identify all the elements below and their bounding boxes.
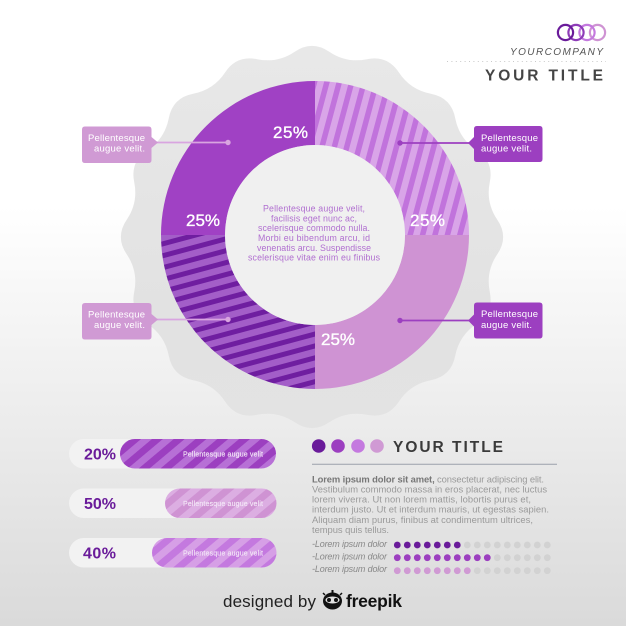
centre text: facilisis eget nunc ac, xyxy=(271,213,357,223)
logo and company heading xyxy=(447,25,606,84)
progress bar: 20%: 20% xyxy=(84,446,116,464)
centre text xyxy=(248,204,381,263)
colour dots xyxy=(312,439,384,453)
callout: bottom left: augue velit. xyxy=(94,320,145,331)
section heading: YOUR TITLE xyxy=(393,439,503,456)
callout: top left: Pellentesque xyxy=(88,133,145,144)
donut chart xyxy=(161,81,469,389)
percentage labels xyxy=(186,123,445,349)
callout: bottom right: augue velit. xyxy=(481,320,532,331)
percentage labels: 25% xyxy=(321,330,355,349)
paragraph: lorem viverra. Ut non lorem mattis, lobortis purus et, xyxy=(312,494,531,504)
icon: freepik mascot xyxy=(323,590,342,610)
progress bar: 50%: 50% xyxy=(84,496,116,513)
segment: top right striped xyxy=(315,81,469,235)
footer credit: designed by xyxy=(223,592,316,611)
centre text: venenatis arcu. Suspendisse xyxy=(257,243,371,253)
callout: top right: Pellentesque xyxy=(481,133,538,144)
paragraph: tempus quis tellus. xyxy=(312,524,389,535)
top title: YOUR TITLE xyxy=(485,68,603,84)
company name: YOURCOMPANY xyxy=(510,47,604,58)
callout: top right: augue velit. xyxy=(481,144,532,154)
callout: bottom right xyxy=(397,302,542,338)
percentage labels: 25% xyxy=(410,211,445,230)
panel: lower right text block xyxy=(312,439,557,574)
callout: bottom left: Pellentesque xyxy=(88,310,145,320)
paragraph: interdum justo. Ut et interdum mauris, ut egestas sapien. xyxy=(312,504,549,515)
progress bar: 40% xyxy=(69,538,276,568)
percentage labels: 25% xyxy=(273,123,308,142)
paragraph: Vestibulum commodo massa in eros placerat, nec luctus xyxy=(312,483,547,494)
scalloped badge backdrop xyxy=(121,46,503,428)
percentage labels: 25% xyxy=(186,211,220,230)
callout: top left xyxy=(82,126,231,163)
segment: bottom left striped xyxy=(161,235,315,389)
progress bar: 50% xyxy=(69,488,276,518)
dot rating list: -Lorem ipsum dolor xyxy=(312,539,388,549)
centre disc xyxy=(225,145,405,325)
centre text: scelerisque commodo nulla. xyxy=(258,223,370,233)
icon: four linked rings xyxy=(558,25,605,40)
centre text: scelerisque vitae enim eu finibus xyxy=(248,253,381,263)
dot rating list: -Lorem ipsum dolor xyxy=(312,552,388,562)
segment: top left solid xyxy=(161,81,315,235)
progress bar: 40%: 40% xyxy=(83,546,116,562)
progress bar: 20%: Pellentesque augue velit xyxy=(183,452,263,458)
dot rating list xyxy=(312,539,551,574)
callout: bottom right: Pellentesque xyxy=(481,309,538,320)
footer credit xyxy=(223,590,402,611)
paragraph xyxy=(312,473,549,535)
centre text: Pellentesque augue velit, xyxy=(263,204,365,214)
segment: bottom right solid xyxy=(315,235,469,389)
progress bar: 40%: Pellentesque augue velit xyxy=(183,550,263,558)
callout: bottom left xyxy=(82,303,231,340)
progress bar: 20% xyxy=(69,439,276,468)
footer credit: freepik xyxy=(346,591,402,611)
paragraph: Lorem ipsum dolor sit amet, consectetur adipiscing elit. xyxy=(312,473,544,484)
dot rating list: -Lorem ipsum dolor xyxy=(312,564,388,574)
centre text: Morbi eu bibendum arcu, id xyxy=(258,233,370,243)
paragraph: Aliquam diam purus, finibus at condimentum ultrices, xyxy=(312,514,533,525)
callout: top right xyxy=(397,126,542,162)
callout: top left: augue velit. xyxy=(94,144,145,154)
progress bar: 50%: Pellentesque augue velit xyxy=(183,501,263,508)
